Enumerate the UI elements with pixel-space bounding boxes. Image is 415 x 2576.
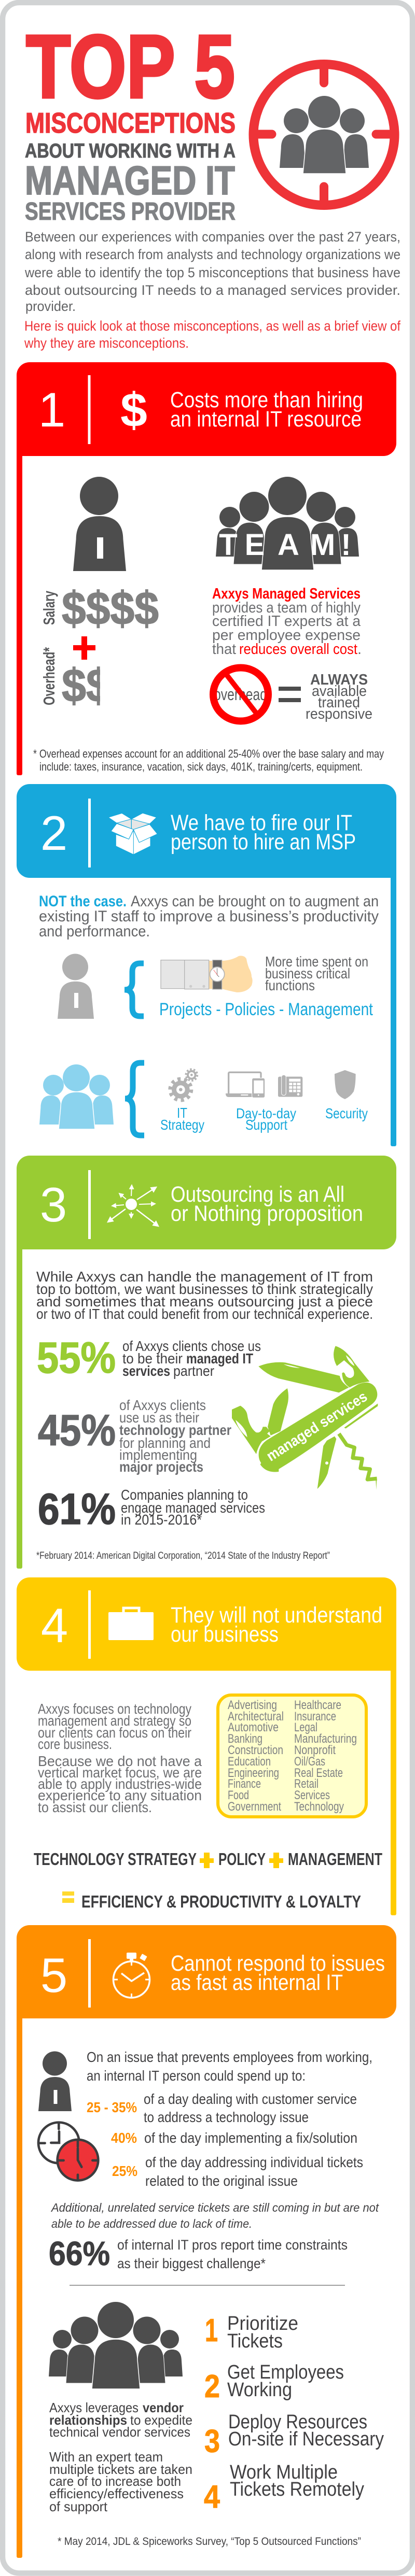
stat 45%: of Axxys clients bbox=[119, 1397, 206, 1413]
numbered steps: Get Employees bbox=[227, 2361, 344, 2383]
stat 55%: to be their bbox=[122, 1350, 183, 1367]
brace bbox=[125, 1063, 144, 1135]
paragraph bbox=[38, 1701, 202, 1815]
equation: strategy plus policy plus management bbox=[34, 1849, 382, 1869]
section 5 header: as fast as internal IT bbox=[171, 1970, 343, 1995]
numbered steps: 3 bbox=[204, 2424, 220, 2459]
source footnote: *February 2014: American Digital Corporation, “2014 State of the Industry Report” bbox=[36, 1550, 330, 1561]
paragraph: able to apply industries-wide bbox=[38, 1776, 202, 1792]
intro red note bbox=[24, 318, 400, 351]
icon: no overhead symbol: overhead bbox=[214, 685, 267, 704]
stat 55%: partner bbox=[173, 1363, 214, 1379]
industries list box: Real Estate bbox=[294, 1766, 343, 1780]
industries list box: Healthcare bbox=[294, 1698, 341, 1712]
intro paragraph: about outsourcing IT needs to a managed services provider. bbox=[25, 282, 400, 298]
intro red note: why they are misconceptions. bbox=[24, 335, 189, 351]
industries list box: Food bbox=[228, 1788, 249, 1802]
overhead footnote bbox=[33, 747, 384, 773]
stats list: of a day dealing with customer service bbox=[144, 2091, 357, 2107]
stat 61%: Companies planning to bbox=[121, 1487, 248, 1503]
industries list box: Insurance bbox=[294, 1710, 336, 1724]
icon labels: IT bbox=[177, 1105, 187, 1121]
icon: team of five: M bbox=[310, 528, 335, 562]
industries list box: Retail bbox=[294, 1777, 319, 1791]
stat 66% bbox=[49, 2235, 348, 2272]
title block bbox=[25, 16, 236, 225]
intro paragraph: provider. bbox=[25, 298, 76, 314]
equation: strategy plus policy plus management: TECHNOLOGY STRATEGY bbox=[34, 1849, 197, 1869]
icon: stopwatch bbox=[113, 1953, 150, 1998]
icon: team of five: A bbox=[278, 528, 299, 562]
icon labels: Security bbox=[325, 1105, 368, 1121]
stat 45% bbox=[38, 1397, 231, 1475]
title block: MISCONCEPTIONS bbox=[25, 107, 236, 139]
industries list box: Automotive bbox=[228, 1720, 279, 1734]
Axxys managed services text: that bbox=[212, 641, 236, 658]
stat 66%: 66% bbox=[49, 2235, 110, 2272]
panel 5: response time bbox=[17, 1925, 396, 2558]
always available list bbox=[306, 672, 372, 722]
industries list box: Technology bbox=[294, 1800, 344, 1814]
paragraph: core business. bbox=[38, 1736, 112, 1752]
always available list: trained bbox=[318, 694, 360, 711]
section 3 header: or Nothing proposition bbox=[171, 1201, 363, 1226]
icon labels: Day-to-day bbox=[236, 1105, 296, 1121]
icon: team of five: T bbox=[219, 528, 238, 562]
section 3 header bbox=[17, 1156, 396, 1249]
stat 55%: services bbox=[122, 1363, 170, 1379]
stats list: 25% bbox=[112, 2163, 137, 2179]
numbered steps: 2 bbox=[204, 2369, 220, 2404]
business critical text bbox=[265, 953, 368, 993]
industries list box: Manufacturing bbox=[294, 1732, 357, 1746]
industries list box: Services bbox=[294, 1788, 330, 1802]
industries list box: Nonprofit bbox=[294, 1743, 336, 1757]
section 1 header: Costs more than hiring bbox=[170, 388, 363, 412]
industries list box: Architectural bbox=[228, 1710, 284, 1724]
icon labels: Strategy bbox=[160, 1117, 204, 1133]
icon: grey employee bbox=[58, 953, 94, 1019]
numbered steps: Deploy Resources bbox=[228, 2411, 367, 2433]
intro text bbox=[87, 2049, 372, 2084]
panel 4: understand our business bbox=[17, 1577, 396, 1915]
Axxys managed services text: certified IT experts at a bbox=[212, 613, 361, 630]
icon: no overhead symbol bbox=[213, 667, 268, 721]
industries list box: Legal bbox=[294, 1720, 317, 1734]
paragraph: vertical market focus, we are bbox=[38, 1764, 202, 1781]
icon: swiss army knife: managed services bbox=[264, 1388, 370, 1465]
business critical text: business critical bbox=[265, 965, 350, 981]
paragraph bbox=[36, 1269, 373, 1322]
stat 45%: use us as their bbox=[119, 1410, 199, 1426]
section 3 header: Outsourcing is an All bbox=[171, 1182, 344, 1207]
section 4 header bbox=[17, 1577, 396, 1671]
Axxys managed services text: reduces overall cost bbox=[239, 641, 357, 658]
Axxys managed services text: provides a team of highly bbox=[212, 600, 361, 616]
stat 45%: for planning and bbox=[119, 1435, 211, 1451]
title block: SERVICES PROVIDER bbox=[25, 198, 236, 225]
section 4 header: our business bbox=[171, 1622, 279, 1647]
salary dollars: $$$$ bbox=[62, 583, 159, 635]
numbered steps: Prioritize bbox=[227, 2313, 298, 2335]
projects policies management: Projects - Policies - Management bbox=[159, 1000, 373, 1019]
vendor text: to expedite bbox=[130, 2412, 192, 2428]
paragraph: Axxys focuses on technology bbox=[38, 1701, 191, 1717]
section 1 header: 1 bbox=[38, 382, 65, 437]
brace bbox=[125, 963, 144, 1016]
vendor text: Axxys leverages bbox=[49, 2400, 139, 2415]
section 4 header: 4 bbox=[41, 1598, 68, 1653]
section 5 header: 5 bbox=[40, 1948, 67, 2002]
overhead dollars: Overhead* bbox=[40, 647, 58, 705]
vendor text: vendor bbox=[143, 2400, 184, 2415]
icon: single employee bbox=[73, 477, 126, 571]
stats list: of the day implementing a fix/solution bbox=[144, 2130, 357, 2146]
vendor text: of support bbox=[49, 2499, 108, 2514]
equation: strategy plus policy plus management: MANAGEMENT bbox=[288, 1849, 382, 1869]
italic note: able to be addressed due to lack of time. bbox=[51, 2217, 252, 2230]
stat 61%: 61% bbox=[38, 1485, 116, 1533]
paragraph: management and strategy so bbox=[38, 1713, 191, 1729]
section 2 header: person to hire an MSP bbox=[171, 830, 356, 855]
NOT the case paragraph: and performance. bbox=[39, 923, 150, 940]
section 3 header: 3 bbox=[40, 1177, 67, 1232]
stats list: to address a technology issue bbox=[144, 2109, 309, 2125]
section 2 header: We have to fire our IT bbox=[171, 810, 352, 835]
survey footnote: * May 2014, JDL & Spiceworks Survey, “Top 5 Outsourced Functions” bbox=[58, 2536, 361, 2547]
industries list box: Government bbox=[228, 1800, 281, 1814]
section 2 header: 2 bbox=[40, 806, 67, 860]
paragraph: experience to any situation bbox=[38, 1787, 202, 1803]
italic note bbox=[50, 2201, 380, 2230]
stat 61% bbox=[38, 1485, 265, 1533]
overhead dollars bbox=[40, 647, 110, 712]
section 2 header bbox=[17, 784, 396, 878]
paragraph: and sometimes that means outsourcing just a piece bbox=[36, 1293, 373, 1310]
paragraph: While Axxys can handle the management of IT from bbox=[36, 1269, 373, 1285]
stats list: related to the original issue bbox=[145, 2173, 298, 2189]
stat 45%: implementing bbox=[119, 1447, 197, 1463]
section 1 header bbox=[17, 362, 396, 456]
stat 45%: major projects bbox=[119, 1459, 203, 1475]
industries list box: Education bbox=[228, 1755, 271, 1769]
icon: swiss army knife bbox=[232, 1346, 378, 1490]
industries list box: Construction bbox=[228, 1743, 283, 1757]
Axxys managed services text: Axxys Managed Services bbox=[212, 586, 361, 602]
stat 55%: 55% bbox=[37, 1333, 116, 1382]
vendor text bbox=[49, 2400, 192, 2514]
industries list box bbox=[218, 1695, 366, 1817]
stat 45%: 45% bbox=[38, 1406, 116, 1455]
icon: watch on wrist bbox=[161, 956, 253, 992]
stat 55%: of Axxys clients chose us bbox=[122, 1338, 261, 1354]
salary dollars: Salary bbox=[40, 590, 58, 625]
intro paragraph bbox=[24, 229, 400, 314]
Axxys managed services text bbox=[212, 586, 362, 658]
paragraph: or two of IT that could benefit from our technical experience. bbox=[36, 1306, 373, 1322]
vendor text: technical vendor services bbox=[49, 2424, 190, 2440]
numbered steps: 1 bbox=[205, 2313, 218, 2349]
NOT the case paragraph: existing IT staff to improve a business’s productivity bbox=[39, 908, 379, 925]
industries list box: Advertising bbox=[228, 1698, 277, 1712]
icon labels: Support bbox=[245, 1117, 287, 1133]
numbered steps: Tickets Remotely bbox=[230, 2479, 364, 2500]
icon: team of five bbox=[216, 477, 359, 570]
stat 45%: technology partner bbox=[119, 1422, 231, 1438]
section 1 side bar bbox=[17, 446, 22, 775]
italic note: Additional, unrelated service tickets are still coming in but are not bbox=[50, 2201, 380, 2214]
business critical text: functions bbox=[265, 977, 315, 993]
industries list box: Finance bbox=[228, 1777, 261, 1791]
vendor text: multiple tickets are taken bbox=[49, 2461, 192, 2477]
paragraph: top to bottom, we want businesses to think strategically bbox=[36, 1281, 373, 1297]
stat 61%: in 2015-2016* bbox=[121, 1512, 202, 1528]
title block: TOP 5 bbox=[26, 16, 235, 117]
stat 66%: of internal IT pros report time constraints bbox=[117, 2237, 348, 2253]
icon: team of five: ! bbox=[341, 528, 351, 562]
intro text: an internal IT person could spend up to: bbox=[87, 2068, 306, 2084]
vendor text: relationships bbox=[49, 2412, 127, 2428]
numbered steps: 4 bbox=[204, 2479, 220, 2515]
stats list bbox=[87, 2091, 363, 2189]
icon row: gears, devices, phone, shield bbox=[170, 1070, 356, 1100]
panel 2: fire IT person bbox=[17, 784, 396, 1146]
title block: ABOUT WORKING WITH A bbox=[25, 140, 236, 162]
numbered steps: On-site if Necessary bbox=[228, 2428, 384, 2450]
panel 1: costs bbox=[17, 362, 396, 775]
paragraph: to assist our clients. bbox=[38, 1799, 152, 1815]
NOT the case paragraph: NOT the case. bbox=[39, 893, 127, 910]
icon: briefcase bbox=[108, 1608, 154, 1640]
always available list: available bbox=[312, 683, 367, 700]
icon: two clocks bbox=[38, 2123, 98, 2181]
stats list: of the day addressing individual tickets bbox=[145, 2154, 363, 2170]
vendor text: care of to increase both bbox=[49, 2473, 181, 2489]
business critical text: More time spent on bbox=[265, 953, 368, 970]
icon: open box bbox=[108, 813, 157, 855]
panel 3: all or nothing bbox=[17, 1156, 396, 1569]
Axxys managed services text: . bbox=[357, 641, 362, 658]
icon: internal IT person bbox=[38, 2051, 72, 2111]
title block: MANAGED IT bbox=[25, 158, 235, 203]
icon labels bbox=[160, 1105, 368, 1133]
always available list: responsive bbox=[306, 706, 372, 722]
section 2 side bar bbox=[391, 871, 396, 1146]
section 4 header: They will not understand bbox=[171, 1603, 382, 1628]
section 3 side bar bbox=[17, 1241, 22, 1569]
paragraph: Because we do not have a bbox=[38, 1753, 202, 1769]
intro text: On an issue that prevents employees from working, bbox=[87, 2049, 372, 2065]
numbered steps: Work Multiple bbox=[230, 2461, 338, 2483]
section 1 header: an internal IT resource bbox=[170, 407, 362, 432]
always available list: ALWAYS bbox=[310, 672, 368, 688]
stats list: 25 - 35% bbox=[87, 2099, 137, 2115]
paragraph: our clients can focus on their bbox=[38, 1725, 191, 1741]
section 4 side bar bbox=[391, 1663, 396, 1915]
stat 55%: managed IT bbox=[186, 1350, 253, 1367]
numbered steps: Tickets bbox=[227, 2330, 283, 2352]
numbered steps: Working bbox=[227, 2379, 292, 2401]
vendor text: With an expert team bbox=[49, 2449, 163, 2465]
equation: strategy plus policy plus management: POLICY bbox=[218, 1849, 266, 1869]
icon: expert team bbox=[49, 2302, 183, 2389]
icon: burst of arrows bbox=[108, 1185, 158, 1226]
equals sign bbox=[279, 687, 301, 702]
NOT the case paragraph bbox=[39, 893, 379, 940]
section 1 header: $ bbox=[120, 383, 147, 437]
section 5 side bar bbox=[17, 2011, 22, 2558]
icon: target with people bbox=[253, 64, 394, 205]
stats list: 40% bbox=[111, 2130, 137, 2146]
NOT the case paragraph: Axxys can be brought on to augment an bbox=[131, 893, 379, 910]
Axxys managed services text: per employee expense bbox=[212, 627, 361, 644]
red plus bbox=[73, 636, 95, 660]
icon: team of five: E bbox=[245, 528, 265, 562]
icon: blue team bbox=[39, 1064, 114, 1129]
industries list box: Oil/Gas bbox=[294, 1755, 325, 1769]
industries list box: Banking bbox=[228, 1732, 262, 1746]
stat 66%: as their biggest challenge* bbox=[117, 2256, 266, 2271]
stat 61%: engage managed services bbox=[121, 1500, 265, 1516]
section 5 header bbox=[17, 1925, 396, 2018]
stat 55% bbox=[37, 1333, 261, 1382]
industries list box: Engineering bbox=[228, 1766, 279, 1780]
numbered steps bbox=[204, 2313, 384, 2515]
vendor text: efficiency/effectiveness bbox=[49, 2486, 184, 2501]
